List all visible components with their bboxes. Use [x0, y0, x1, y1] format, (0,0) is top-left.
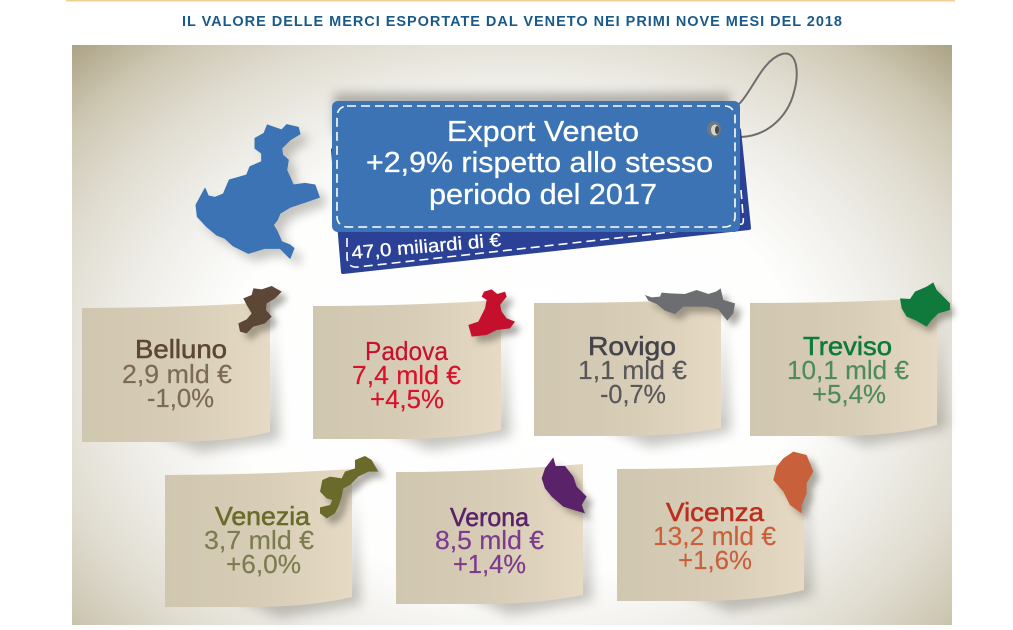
map: Padova	[468, 289, 521, 343]
Padova text: Padova	[365, 336, 449, 366]
card: Venezia	[165, 456, 384, 618]
card: Vicenza	[617, 452, 819, 612]
card: Treviso	[750, 282, 954, 446]
card: Rovigo	[534, 288, 741, 447]
Rovigo text	[578, 331, 688, 409]
Vicenza text: +1,6%	[678, 545, 752, 575]
Belluno text	[122, 334, 233, 413]
Treviso text: Treviso	[803, 331, 892, 361]
Belluno text: 2,9 mld €	[122, 359, 233, 389]
tag headline: Export Veneto	[447, 116, 639, 148]
back tag	[333, 130, 749, 272]
Verona text	[435, 502, 545, 579]
back tag text: 47,0 miliardi di €	[351, 229, 503, 263]
Treviso text: +5,4%	[812, 379, 886, 409]
Verona text: +1,4%	[453, 549, 526, 579]
Padova text	[352, 336, 462, 414]
card: Verona	[396, 457, 593, 615]
map: Rovigo	[645, 288, 741, 327]
background panel	[72, 45, 952, 625]
tag shadow	[334, 93, 730, 133]
map: Verona	[542, 457, 593, 519]
card: Belluno	[82, 286, 288, 452]
Padova text: 7,4 mld €	[352, 360, 462, 390]
Venezia text: 3,7 mld €	[204, 525, 315, 555]
map: Venezia	[320, 456, 384, 524]
Rovigo text: -0,7%	[600, 379, 666, 409]
Verona text: Verona	[450, 502, 530, 532]
Belluno text: Belluno	[135, 334, 227, 364]
title: IL VALORE DELLE MERCI ESPORTATE DAL VENETO NEI PRIMI NOVE MESI DEL 2018	[182, 14, 842, 30]
Treviso text: 10,1 mld €	[787, 355, 910, 385]
front tag dashes	[337, 106, 735, 227]
Venezia text: Venezia	[215, 501, 311, 531]
map: Treviso	[900, 282, 954, 333]
Belluno text: -1,0%	[147, 383, 214, 413]
Venezia text	[204, 501, 315, 579]
Treviso text	[787, 331, 910, 409]
Venezia text: +6,0%	[226, 549, 301, 579]
Rovigo text: Rovigo	[588, 331, 676, 361]
map: Veneto region	[196, 125, 327, 266]
tag headline	[366, 116, 713, 211]
card: Padova	[313, 289, 521, 450]
top rule	[66, 0, 955, 2]
front tag	[332, 101, 740, 232]
tag string	[739, 54, 797, 137]
Vicenza text: Vicenza	[666, 497, 765, 527]
tag headline: +2,9% rispetto allo stesso	[366, 147, 713, 179]
Padova text: +4,5%	[370, 384, 444, 414]
eyelet	[707, 121, 721, 137]
map: Belluno	[238, 286, 288, 339]
back tag dashes	[347, 190, 743, 267]
Rovigo text: 1,1 mld €	[578, 355, 688, 385]
Vicenza text	[653, 497, 777, 575]
tag headline: periodo del 2017	[429, 179, 657, 211]
Verona text: 8,5 mld €	[435, 525, 545, 555]
map: Vicenza	[773, 452, 819, 519]
price tag: export total	[332, 54, 797, 272]
Vicenza text: 13,2 mld €	[653, 521, 777, 551]
